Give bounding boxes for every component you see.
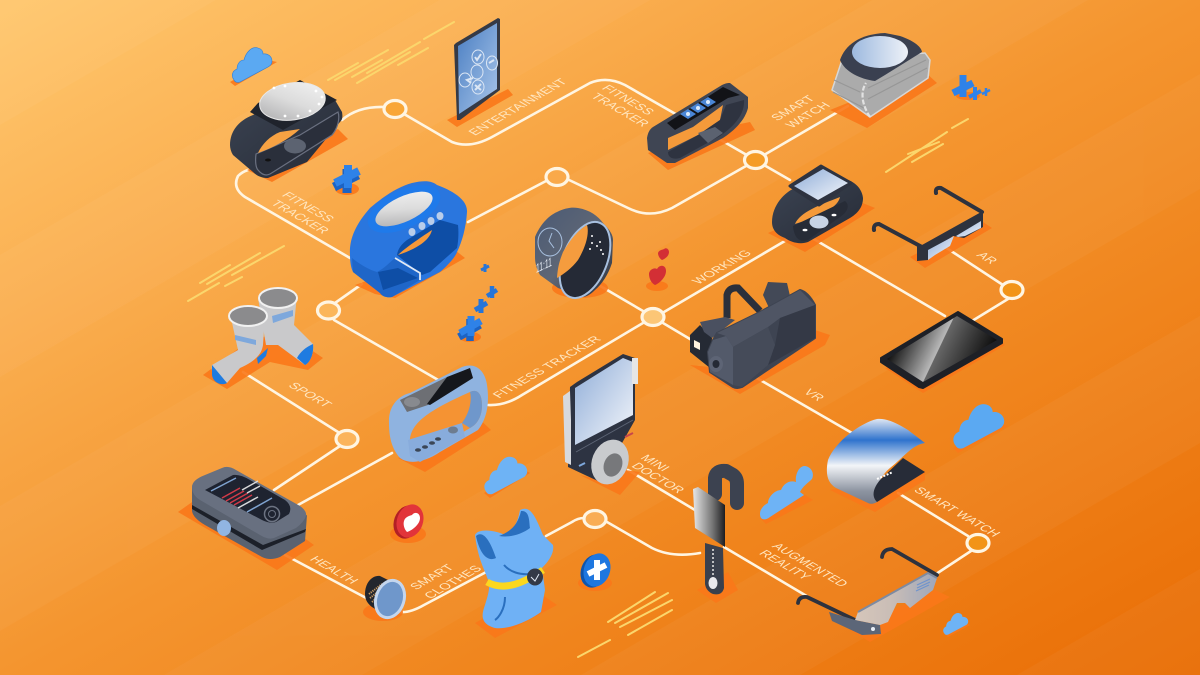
labels: ENTERTAINMENT — [465, 77, 571, 137]
device: mini doctor — [563, 354, 640, 495]
device: sport socks — [203, 288, 323, 389]
labels: FITNESS TRACKER — [490, 334, 604, 400]
labels: AR — [973, 250, 1001, 266]
icon: hearts — [646, 248, 669, 291]
icon: blue plus coin — [576, 550, 615, 591]
labels: SMART — [407, 562, 457, 592]
device: black fitness tracker — [647, 83, 755, 170]
labels: SPORT — [285, 381, 335, 410]
device: smart clothes — [475, 509, 557, 638]
device: wrap smart watch — [827, 419, 925, 512]
icon: cloud bottom right — [943, 613, 970, 637]
labels: CLOTHES — [421, 563, 485, 601]
device: wrist wrap watch — [693, 471, 738, 603]
icon: cloud with tail — [760, 466, 813, 524]
labels: VR — [800, 387, 828, 403]
labels: DOCTOR — [628, 461, 688, 495]
device: black tablet — [881, 312, 1005, 393]
labels: FITNESS — [599, 83, 657, 117]
icon: cloud right — [953, 404, 1008, 453]
device: small smart ring — [363, 576, 409, 621]
device: round fitness watch — [230, 79, 348, 182]
device: metal band smart watch — [830, 33, 937, 128]
connector lines network — [236, 80, 1008, 612]
device: square smart watch — [768, 166, 875, 252]
labels — [267, 77, 1003, 601]
device: VR headset — [690, 282, 830, 394]
decorative yellow dashes — [188, 22, 968, 657]
connector nodes — [318, 100, 1023, 552]
device: blue fitness band — [350, 175, 467, 298]
labels: SMART — [768, 93, 818, 123]
labels: AUGMENTED — [769, 541, 851, 589]
labels: TRACKER — [267, 198, 333, 236]
labels: WORKING — [689, 248, 755, 286]
labels: SMART WATCH — [911, 485, 1003, 539]
device: health monitor — [178, 467, 314, 570]
device: smart ring — [535, 208, 620, 305]
icon: cloud centre — [484, 457, 530, 498]
device: AR glasses — [874, 188, 992, 268]
device: smart ring: 11:11 — [536, 256, 552, 277]
icon: blue plus stack — [459, 264, 497, 342]
labels: MINI — [637, 453, 673, 473]
labels: REALITY — [756, 548, 815, 582]
device: augmented reality glasses — [798, 549, 950, 642]
labels: FITNESS — [279, 190, 337, 224]
icon: red heart coin — [389, 501, 428, 543]
icon: cloud top left — [230, 48, 277, 86]
icon: tablet entertainment — [447, 18, 513, 127]
labels: HEALTH — [306, 554, 362, 586]
labels: WATCH — [782, 100, 834, 130]
labels: TRACKER — [587, 91, 653, 129]
icon: blue plus top left — [334, 165, 359, 195]
device: light blue band tracker — [389, 366, 491, 472]
icon: blue plus cluster top right — [953, 75, 990, 100]
